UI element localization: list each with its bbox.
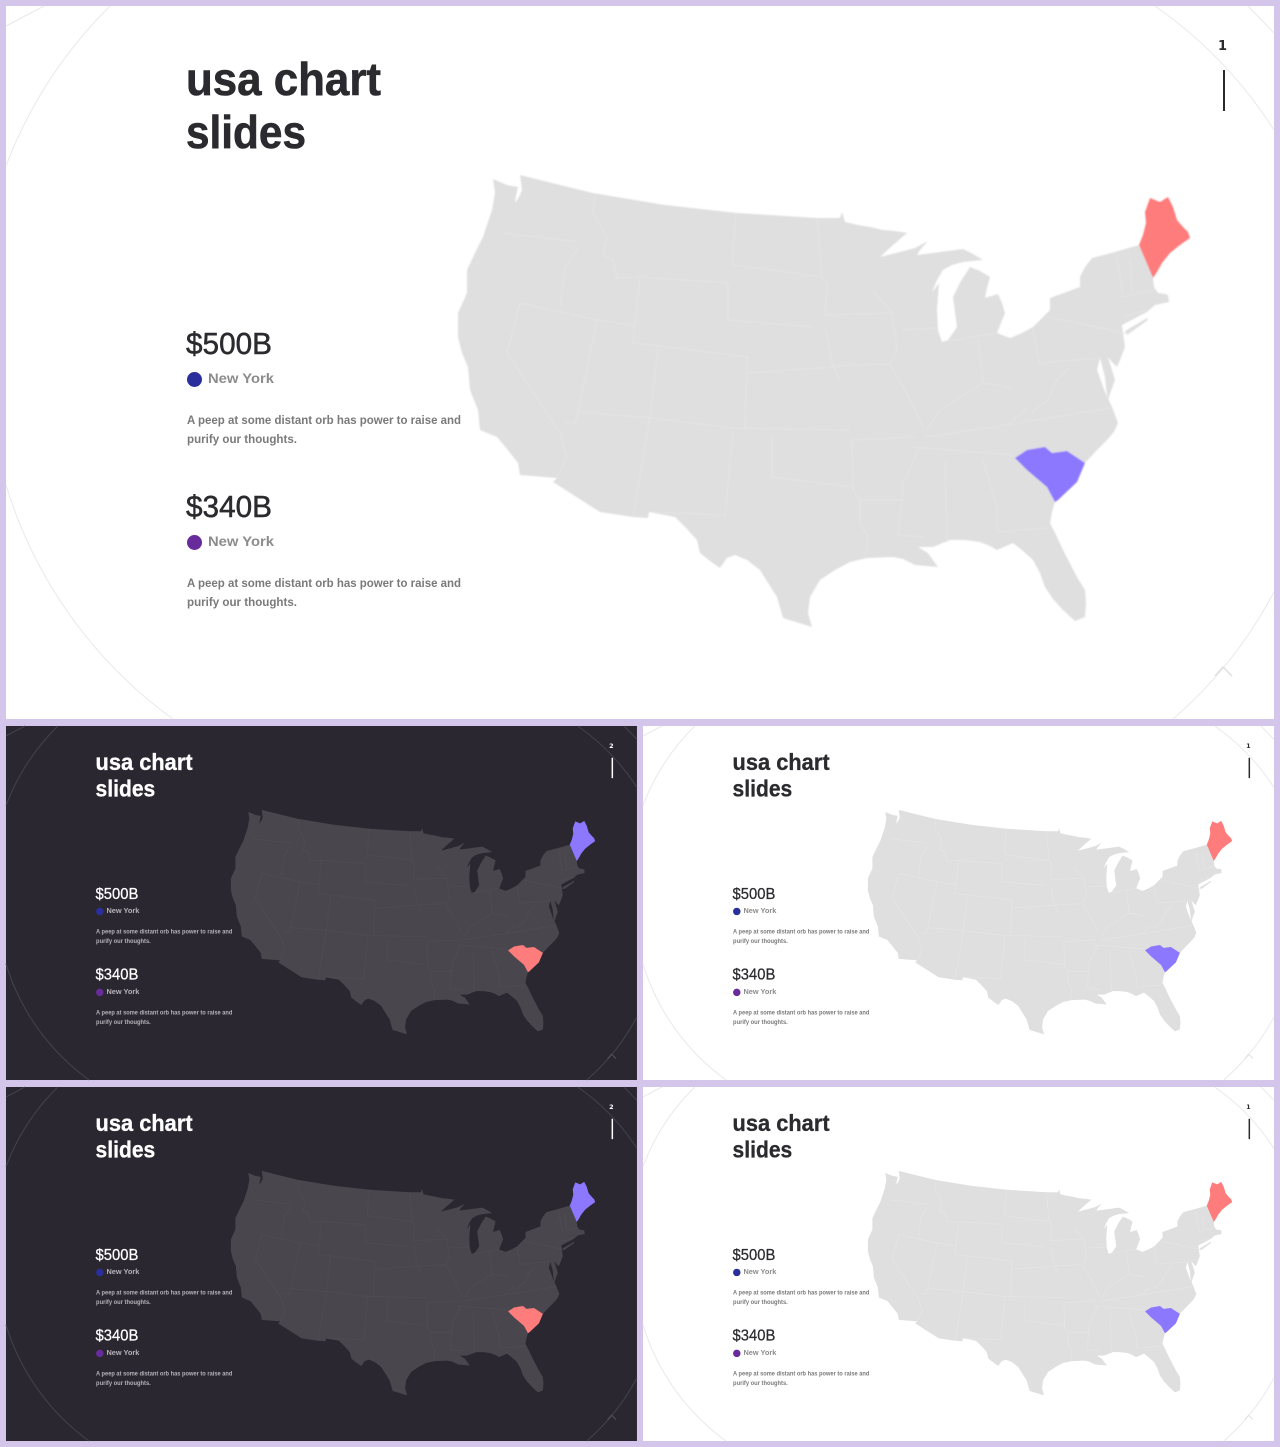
title: usa chart	[96, 749, 193, 775]
stat: $500B: A peep at some distant orb has power to raise and	[733, 1291, 870, 1297]
chevron icon	[608, 1054, 616, 1059]
title: usa chart	[96, 1110, 193, 1136]
stat: $500B: $500B	[733, 886, 775, 903]
page number: 1	[1246, 742, 1251, 750]
stat: $340B	[733, 1328, 870, 1387]
slide background	[6, 726, 637, 1080]
stat: $340B: New York	[744, 989, 776, 996]
page tick	[1223, 70, 1225, 111]
chevron icon	[1245, 1054, 1253, 1059]
title: usa chart	[733, 1110, 830, 1136]
USA map	[231, 810, 595, 1034]
slide background	[643, 1087, 1274, 1441]
page tick	[612, 758, 613, 778]
stat: $500B	[733, 886, 870, 945]
slide background	[6, 6, 1274, 719]
title	[186, 53, 381, 158]
stat: $500B: New York	[744, 908, 776, 915]
stat: $340B: purify our thoughts.	[187, 595, 297, 609]
chevron icon	[1215, 667, 1232, 676]
stat: $500B: New York	[208, 370, 274, 386]
stat: $340B: purify our thoughts.	[96, 1381, 151, 1387]
stat: $500B: New York	[744, 1269, 776, 1276]
stat: $500B: purify our thoughts.	[733, 939, 788, 945]
stat: $500B: $500B	[96, 886, 138, 903]
stat: $340B: A peep at some distant orb has power to raise and	[96, 1371, 233, 1377]
stat: $500B: purify our thoughts.	[96, 939, 151, 945]
stat: $500B: A peep at some distant orb has power to raise and	[96, 930, 233, 936]
chevron icon	[1245, 1415, 1253, 1420]
stat: $340B: $340B	[96, 967, 138, 984]
page number: 1	[1246, 1103, 1251, 1111]
stat: $500B	[733, 1247, 870, 1306]
stat: $340B: $340B	[733, 1328, 775, 1345]
title	[733, 1110, 830, 1162]
slide background	[6, 1087, 637, 1441]
stat: $500B: purify our thoughts.	[96, 1300, 151, 1306]
USA map	[868, 810, 1232, 1034]
USA map	[231, 1171, 595, 1395]
slide 2: dark slide	[6, 726, 637, 1080]
stat: $500B: A peep at some distant orb has power to raise and	[96, 1291, 233, 1297]
slide 3: light slide	[643, 726, 1274, 1080]
title: slides	[733, 776, 792, 801]
decorative arcs	[6, 1087, 637, 1441]
stat: $500B: A peep at some distant orb has power to raise and	[733, 930, 870, 936]
title	[96, 749, 193, 801]
title: usa chart	[186, 53, 381, 105]
stat: $340B: $340B	[96, 1328, 138, 1345]
stat: $340B: A peep at some distant orb has power to raise and	[733, 1010, 870, 1016]
stat: $340B: purify our thoughts.	[96, 1020, 151, 1026]
slide background	[643, 726, 1274, 1080]
stat: $500B	[96, 1247, 233, 1306]
stat: $340B	[96, 1328, 233, 1387]
title: slides	[733, 1137, 792, 1162]
stat: $340B: purify our thoughts.	[733, 1020, 788, 1026]
stat: $340B: A peep at some distant orb has power to raise and	[96, 1010, 233, 1016]
stat: $340B: purify our thoughts.	[733, 1381, 788, 1387]
title: slides	[186, 106, 306, 158]
decorative arcs	[643, 1087, 1274, 1441]
stat: $500B: $500B	[96, 1247, 138, 1264]
stat: $500B: New York	[107, 908, 139, 915]
stat: $500B	[186, 326, 461, 446]
title: usa chart	[733, 749, 830, 775]
stat: $340B: A peep at some distant orb has power to raise and	[187, 576, 461, 590]
stat: $340B	[733, 967, 870, 1026]
page number: 1	[1218, 39, 1227, 54]
page tick	[1249, 758, 1250, 778]
stat: $500B: purify our thoughts.	[187, 432, 297, 446]
title: slides	[96, 1137, 155, 1162]
slide 1: large light slide	[6, 6, 1274, 719]
stat: $340B: $340B	[186, 489, 272, 524]
stat: $500B: A peep at some distant orb has power to raise and	[187, 413, 461, 427]
stat: $340B: A peep at some distant orb has power to raise and	[733, 1371, 870, 1377]
USA map	[868, 1171, 1232, 1395]
stat: $340B: $340B	[733, 967, 775, 984]
page tick	[612, 1119, 613, 1139]
stat: $340B: New York	[208, 533, 274, 549]
stat: $340B: New York	[107, 1350, 139, 1357]
page number: 2	[609, 1103, 614, 1111]
decorative arcs	[643, 726, 1274, 1080]
stat: $340B: New York	[744, 1350, 776, 1357]
page tick	[1249, 1119, 1250, 1139]
slide 4: dark slide	[6, 1087, 637, 1441]
stat: $340B	[96, 967, 233, 1026]
stat: $500B: purify our thoughts.	[733, 1300, 788, 1306]
chevron icon	[608, 1415, 616, 1420]
stat: $500B: $500B	[186, 326, 272, 361]
stat: $500B: New York	[107, 1269, 139, 1276]
stat: $340B	[186, 489, 461, 609]
stat: $500B	[96, 886, 233, 945]
decorative arcs	[6, 726, 637, 1080]
stat: $340B: New York	[107, 989, 139, 996]
title	[96, 1110, 193, 1162]
decorative arcs	[6, 6, 1274, 719]
USA map	[458, 175, 1190, 627]
title	[733, 749, 830, 801]
slide 5: light slide	[643, 1087, 1274, 1441]
page number: 2	[609, 742, 614, 750]
title: slides	[96, 776, 155, 801]
stat: $500B: $500B	[733, 1247, 775, 1264]
